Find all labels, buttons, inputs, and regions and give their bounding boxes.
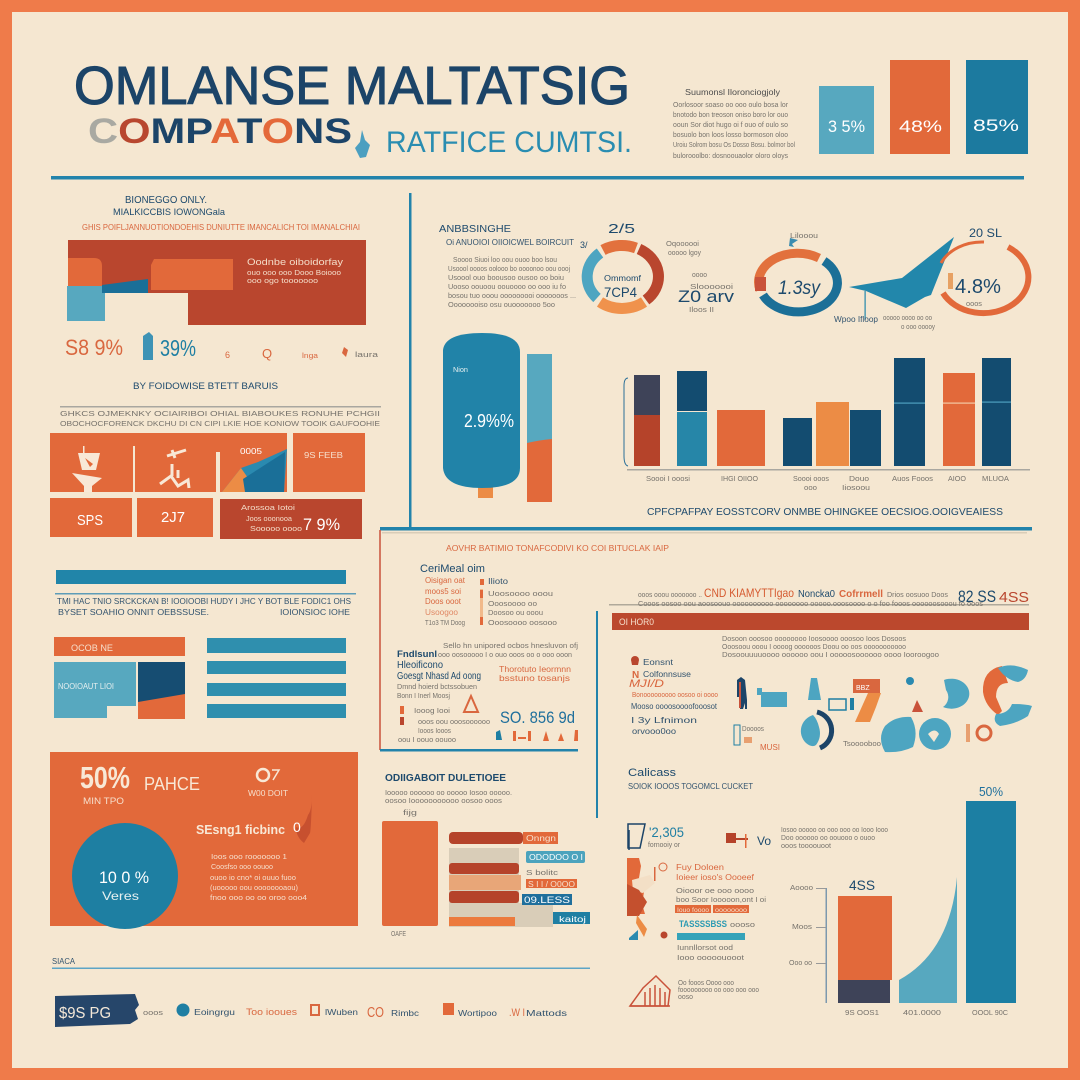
header bars: 3 5% bbox=[828, 117, 865, 136]
panel: middle text: Ooosoooo oosooo bbox=[488, 620, 557, 627]
panel: orange stat: 50% bbox=[80, 760, 130, 795]
header bars: 85% bbox=[973, 116, 1019, 135]
stat row: laura bbox=[355, 352, 378, 359]
panel: middle text: Dmnd hoierd bctssobuen bbox=[397, 684, 477, 691]
donut chart: right: ooos bbox=[966, 301, 983, 308]
panel: right section: OI HOR0 bbox=[619, 617, 654, 627]
icon: wedge bbox=[222, 447, 287, 492]
panel: donut text: 3/ bbox=[580, 240, 588, 250]
panel: bottom right text: Vo bbox=[757, 834, 771, 848]
panel: right section: Bonooooooooo oosoo oi oooo bbox=[632, 690, 718, 699]
icon: building chart bbox=[630, 976, 670, 1006]
title: COMP ATONS bbox=[88, 112, 352, 151]
header text block: bulorooolbo: dosnoouaolor oloro oloys bbox=[673, 153, 788, 160]
panel: stacked labels: oosoo Iooooooooooo oosoo ooos bbox=[385, 798, 503, 805]
header text block: Oorlosoor soaso oo ooo oulo bosa lor bbox=[673, 102, 789, 109]
panel: bottom right text: Oo fooos Oooo ooo bbox=[678, 980, 734, 987]
donut chart: right bbox=[941, 226, 1028, 313]
panel: stacked labels: S I I / O0OO bbox=[528, 880, 575, 889]
title bbox=[74, 56, 632, 159]
panel: middle text: Iooog Iooi bbox=[414, 708, 451, 715]
bottom right bar chart: Moos bbox=[792, 924, 813, 931]
panel: orange blocks: SPS bbox=[77, 512, 103, 529]
panel: orange blocks: 7 9% bbox=[303, 515, 340, 534]
stat row bbox=[65, 332, 378, 361]
stat row: lnga bbox=[302, 353, 318, 360]
footer legend: Wortipoo bbox=[458, 1009, 498, 1018]
icon: figure bbox=[160, 450, 189, 488]
panel: teal bars: OCOB NE bbox=[71, 643, 113, 653]
panel: middle text: oou I oouo oouoo bbox=[398, 737, 456, 744]
panel: top left: BY FOIDOWISE BTETT BARUIS bbox=[133, 381, 278, 392]
panel: middle text: AOVHR BATIMIO TONAFCODIVI KO COI BITUCLAK IAIP bbox=[446, 543, 669, 553]
panel: bottom right text: fooooooooo oo ooo ooo ooo bbox=[678, 987, 759, 994]
panel: middle text: Sello hn unipored ocbos hnesluvon ofj bbox=[443, 643, 579, 650]
icon: wedge: 0005 bbox=[240, 447, 263, 456]
panel: middle text: ooo oosooooo I o ouo ooos oo o ooo ooon bbox=[438, 652, 572, 659]
donut chart: right: 4.8% bbox=[955, 276, 1001, 298]
panel: orange stat: (uooooo oou oooooooaou) bbox=[210, 885, 298, 892]
panel: bottom right text: Doo oooooo oo oouooo o ouoo bbox=[781, 835, 875, 842]
panel: top left bbox=[65, 195, 378, 392]
footer legend: $9S PG bbox=[59, 1005, 111, 1022]
bar chart: Soooi I ooosi bbox=[646, 476, 690, 483]
figure illustration bbox=[627, 858, 668, 940]
donut chart: left: Ommomf bbox=[604, 273, 642, 283]
panel: bottom right text: Ioieer ioso's Oooeef bbox=[676, 872, 755, 882]
header text block: bnotodo bon treoson oniso boro lor ouo bbox=[673, 112, 788, 119]
side bar bbox=[527, 354, 552, 502]
panel: top left: GHIS POIFLJANNUOTIONDOEHIS DUNIUTTE IMANCALICH TOI IMANALCHIAI bbox=[82, 222, 360, 232]
panel: teal bars: NOOIOAUT LIOI bbox=[58, 682, 114, 691]
donut side labels: Oqoooooi bbox=[666, 241, 699, 248]
bar chart: Douo bbox=[849, 476, 869, 483]
illustration cluster bbox=[734, 665, 1032, 752]
panel: orange stat: Coosfso ooo oouoo bbox=[211, 864, 273, 871]
bar chart: IHGI OIIOO bbox=[721, 476, 759, 483]
panel: orange stat: SEsng1 ficbinc bbox=[196, 822, 285, 837]
panel: middle text: bsstuno tosanjs bbox=[499, 673, 570, 683]
panel: orange blocks: OBOCHOCFORENCK DKCHU DI CN CIPI LKIE HOE KONIOW TOOIK GAUFOOHIE bbox=[60, 421, 380, 428]
donut chart: right: 20 SL bbox=[969, 226, 1002, 240]
panel: middle text: moos5 soi bbox=[425, 587, 461, 596]
footer legend: Rimbc bbox=[391, 1009, 419, 1018]
donut side labels: Iloos II bbox=[689, 307, 714, 314]
chart block bbox=[67, 240, 366, 325]
panel: right section: Cooos oosoo oou aoosoouo oooooooooo oooooooo ooooo.ooosoooo o o foo fooos oooooosooou fo ooos bbox=[638, 601, 984, 608]
panel: stacked labels: OAFE bbox=[391, 931, 406, 938]
footer legend: Too iooues bbox=[246, 1007, 298, 1017]
panel: bottom right text: '2,305 bbox=[649, 824, 684, 840]
panel: orange blocks: Joos ooonooa bbox=[246, 514, 293, 523]
panel: stacked labels: Iooooo oooooo oo ooooo Iosoo ooooo. bbox=[385, 790, 512, 797]
panel: middle text bbox=[380, 530, 1027, 752]
panel: bottom right text: Fuy Doloen bbox=[676, 862, 724, 872]
header bars bbox=[819, 60, 1028, 154]
panel: right section: 82 SS bbox=[958, 587, 996, 606]
bar chart: ooo bbox=[804, 485, 817, 492]
bottom right bar chart: Aoooo bbox=[790, 885, 813, 892]
panel: bottom right text: Iouo foooo bbox=[677, 908, 710, 914]
donut chart: middle: 1.3sy bbox=[778, 278, 821, 299]
footer legend: ooos bbox=[143, 1010, 164, 1017]
icon: door bbox=[628, 824, 645, 850]
panel: bottom right text: oooooooo bbox=[715, 908, 748, 914]
panel: middle text: Oisigan oat bbox=[425, 576, 466, 585]
panel: middle text: ooos oou ooosoooooo bbox=[418, 719, 490, 726]
panel: middle text: CeriMeal oim bbox=[420, 563, 485, 575]
panel: stacked labels bbox=[382, 773, 590, 938]
icon: target bbox=[257, 769, 279, 781]
panel: donut text: Usoool ouo boousoo ousoo oo boiu bbox=[448, 275, 564, 282]
cylinder: Nion bbox=[453, 367, 468, 374]
panel: orange stat: fnoo ooo oo oo oroo ooo4 bbox=[210, 895, 307, 902]
panel: right section: Ooosoou ooou I oooog oooooos Doou oo oos ooooooooooo bbox=[722, 644, 906, 651]
footer legend: Eoingrgu bbox=[194, 1008, 235, 1017]
footer legend: CO bbox=[367, 1004, 384, 1021]
panel: teal bars: IOIONSIOC IOHE bbox=[280, 608, 350, 617]
panel: right section: Dosoon ooosoo oooooooo Ioosoooo ooosoo Ioos Dosoos bbox=[722, 636, 907, 643]
panel: middle text: Uoosoooo ooou bbox=[488, 591, 553, 598]
panel: orange stat: ouoo io cno* oi ouuo fuoo bbox=[210, 875, 296, 882]
header text block bbox=[673, 88, 795, 160]
donut side labels bbox=[666, 241, 735, 314]
panel: right section bbox=[596, 586, 1029, 818]
panel: right section: Mooso oooosoooofooosot bbox=[631, 702, 718, 711]
panel: orange blocks: GHKCS OJMEKNKY OCIAIRIBOI OHIAL BIABOUKES RONUHE PCHGII bbox=[60, 411, 380, 418]
chart block: ouo ooo ooo Dooo Boiooo bbox=[247, 268, 341, 277]
bottom right bar chart bbox=[789, 784, 1016, 1017]
bar chart: Soooi ooos bbox=[793, 476, 830, 483]
panel: stacked labels: fijg bbox=[403, 810, 417, 817]
footer legend: lWuben bbox=[325, 1008, 358, 1017]
footer legend: .W I bbox=[509, 1007, 525, 1019]
stat row: S8 9% bbox=[65, 335, 123, 360]
icon: warning triangle bbox=[464, 696, 478, 712]
panel: right section: N bbox=[632, 670, 639, 681]
panel: bottom right text: oooso bbox=[730, 922, 755, 929]
panel: right section: Dosoouuuuoooo oooooo oou I ooooosoooooo oooo Iooroogoo bbox=[722, 652, 939, 659]
panel: orange stat bbox=[50, 752, 358, 929]
icon: cup bbox=[72, 446, 102, 492]
panel: stacked labels: kaitoj bbox=[559, 915, 586, 924]
chart caption: CPFCPAFPAY EOSSTCORV ONMBE OHINGKEE OECSIOG.OOIGVEAIESS bbox=[647, 507, 1003, 518]
panel: orange stat: Ioos ooo rooooooo 1 bbox=[211, 854, 287, 861]
bottom right bar chart: OOOL 90C bbox=[972, 1010, 1008, 1017]
arrow shape bbox=[834, 237, 954, 331]
panel: bottom right text: TASSSSBSS bbox=[679, 919, 727, 929]
panel: top left: BIONEGGO ONLY. bbox=[125, 195, 207, 206]
title: RATFICE CUMTSI. bbox=[386, 126, 632, 159]
panel: right section: CND KIAMYTTIgao bbox=[704, 586, 794, 600]
panel: donut text: Uooso oouoou oouoooo oo ooo iu fo bbox=[448, 284, 566, 291]
stat circle: Veres bbox=[102, 889, 139, 903]
bottom right bar chart: 9S OOS1 bbox=[845, 1010, 879, 1017]
panel: right section: Drios oosuoo Doos bbox=[887, 592, 949, 599]
panel: stacked labels: S bolitc bbox=[526, 870, 559, 877]
panel: right section: Eonsnt bbox=[643, 658, 674, 667]
bar chart: AIOO bbox=[948, 476, 967, 483]
stat row: Q bbox=[262, 346, 272, 361]
panel: teal bars: TMI HAC TNIO SRCKCKAN B! IOOIOOBI HUDY I JHC Y BOT BLE FODIC1 OHS bbox=[57, 597, 351, 606]
panel: bottom right text: Oiooor oe ooo oooo bbox=[676, 888, 754, 895]
panel: middle text: T1o3 TM Doog bbox=[425, 620, 465, 627]
panel: stacked labels: 09.LESS bbox=[524, 895, 570, 905]
donut chart: left: 7CP4 bbox=[604, 284, 637, 300]
donut chart: middle bbox=[755, 233, 837, 312]
panel: middle text: Ilioto bbox=[488, 577, 509, 586]
panel: middle text: Iooos Iooos bbox=[418, 728, 451, 735]
panel: middle text: Doos ooot bbox=[425, 597, 462, 606]
panel: bottom right text: boo Soor Iooooon,ont I oi bbox=[676, 897, 766, 904]
cylinder: 2.9%% bbox=[464, 411, 514, 431]
panel: right section: orvooo0oo bbox=[632, 727, 677, 736]
panel: bottom right text bbox=[627, 767, 888, 1006]
panel: donut text: Oooooooiso osu ouooooooo 5oo bbox=[448, 302, 555, 309]
panel: bottom right text: Calicass bbox=[628, 767, 677, 779]
chart block: ooo ogo tooooooo bbox=[247, 276, 318, 285]
bottom right bar chart: 50% bbox=[979, 784, 1003, 799]
panel: middle text: Doosoo ou ooou bbox=[488, 610, 543, 617]
panel: orange stat: PAHCE bbox=[144, 774, 200, 794]
donut side labels: Z0 arv bbox=[678, 287, 735, 306]
donut side labels: ooooo lgoy bbox=[668, 250, 701, 257]
header text block: bosuolo bon loos losso bormoson oloo bbox=[673, 132, 788, 139]
bottom right bar chart: 401.0000 bbox=[903, 1010, 941, 1017]
panel: right section: Noncka0 bbox=[798, 589, 835, 600]
bar chart bbox=[624, 358, 1030, 492]
stat circle bbox=[72, 823, 178, 929]
panel: orange stat: W00 DOIT bbox=[248, 788, 288, 798]
panel: donut text: Oi ANUOIOI OIIOICWEL BOIRCUIT bbox=[446, 238, 574, 247]
arrow shape: ooooo oooo oo oo bbox=[883, 315, 932, 322]
panel: teal bars bbox=[54, 570, 356, 719]
header bars: 48% bbox=[899, 117, 942, 136]
stat row: 39% bbox=[160, 335, 196, 361]
panel: bottom right text: ooos toooouoot bbox=[781, 843, 831, 850]
panel: donut text bbox=[439, 224, 588, 309]
header text block: Suumonsl Iloronciogjoly bbox=[685, 88, 780, 97]
donut chart: left: 2/5 bbox=[608, 221, 635, 236]
bottom right bar chart: Ooo oo bbox=[789, 960, 812, 967]
panel: bottom right text: Iunnllorsot ood bbox=[677, 945, 733, 952]
donut chart: middle: Lilooou bbox=[790, 233, 818, 240]
header text block: Uroiu Solrom bosu Os Dosso Bosu. bolmor bol bbox=[673, 142, 795, 149]
header text block: ooun Sor diot hugo oi f ouo of oulo so bbox=[673, 122, 788, 129]
panel: donut text: bosou tuo ooou ooooooooi ooooooos ... bbox=[448, 293, 576, 300]
icon: people row bbox=[496, 730, 578, 741]
panel: orange blocks: 9S FEEB bbox=[304, 451, 343, 460]
panel: middle text: Goesgt Nhasd Ad oong bbox=[397, 671, 481, 682]
panel: donut text: Usoool oooos oolooo bo oooonoo oou oooj bbox=[448, 266, 570, 273]
panel: bottom right text: SOIOK IOOOS TOGOMCL CUCKET bbox=[628, 782, 753, 791]
arrow shape: Wpoo Ifloop bbox=[834, 315, 879, 324]
panel: top left: MIALKICCBIS IOWONGala bbox=[113, 207, 226, 218]
footer legend: Mattods bbox=[526, 1009, 567, 1018]
panel: stacked labels: ODIIGABOIT DULETIOEE bbox=[385, 773, 506, 784]
donut side labels: Slooooooi bbox=[690, 284, 734, 291]
panel: orange stat: 0 bbox=[293, 819, 301, 835]
panel: bottom right text: Iooo ooooouooot bbox=[677, 955, 744, 962]
panel: bottom right text: Iosoo ooooo oo ooo ooo oo Iooo Iooo bbox=[781, 827, 888, 834]
panel: stacked labels: ODODOO O I bbox=[529, 853, 583, 862]
panel: donut text: ANBBSINGHE bbox=[439, 224, 511, 235]
panel: right section: 4SS bbox=[999, 589, 1029, 606]
illustration cluster: Tsooooboo bbox=[843, 741, 881, 748]
bar chart: Iiosoou bbox=[842, 485, 870, 492]
stat circle: 10 0 % bbox=[99, 868, 149, 887]
panel: stacked labels: Onngn bbox=[526, 834, 556, 843]
panel: right section: Colfonnsuse bbox=[643, 670, 692, 679]
illustration cluster: MUSI bbox=[760, 743, 780, 752]
footer legend bbox=[52, 957, 590, 1027]
illustration cluster: Doooos bbox=[742, 726, 764, 733]
panel: teal bars: BYSET SOAHIO ONNIT OEBSSUSE. bbox=[58, 608, 209, 617]
panel: middle text: Fndlsunl bbox=[397, 649, 437, 659]
arrow shape: o ooo ooooy bbox=[901, 324, 935, 331]
bottom right bar chart: 4SS bbox=[849, 877, 875, 893]
panel: bottom right text: fornooiy or bbox=[648, 842, 681, 849]
panel: bottom right text: ooso bbox=[678, 994, 693, 1001]
stat row: 6 bbox=[225, 350, 230, 360]
title: OMLANSE MALTATSIG bbox=[74, 56, 630, 116]
panel: middle text: SO. 856 9d bbox=[500, 708, 575, 727]
panel: orange blocks: Arossoa Iotoi bbox=[241, 503, 295, 512]
donut side labels: oooo bbox=[692, 272, 707, 279]
panel: middle text: Thorotuto Ieormnn bbox=[499, 664, 571, 674]
bar chart: Auos Fooos bbox=[892, 476, 934, 483]
donut chart: left bbox=[587, 221, 658, 308]
illustration cluster: BBZ bbox=[856, 685, 870, 692]
panel: middle text: Hleoificono bbox=[397, 660, 443, 671]
panel: middle text: Usoogoo bbox=[425, 608, 459, 617]
chart block: Oodnbe oiboidorfay bbox=[247, 257, 343, 268]
panel: donut text: Soooo Siuoi loo oou ouoo boo lsou bbox=[453, 257, 557, 264]
panel: middle text: Bonn I Inerl Moosj bbox=[397, 693, 450, 700]
panel: right section: MJI/D bbox=[629, 678, 664, 690]
cylinder bbox=[443, 333, 520, 498]
panel: right section: I 3y Lfnimon bbox=[631, 716, 697, 725]
bar chart: MLUOA bbox=[982, 476, 1009, 483]
panel: orange blocks bbox=[50, 406, 381, 539]
panel: right section: ooos ooou ooooooo .. bbox=[638, 592, 702, 599]
panel: right section: Cofrrmell bbox=[839, 589, 883, 600]
panel: orange blocks: Sooooo oooo bbox=[250, 524, 302, 533]
panel: orange blocks: 2J7 bbox=[161, 509, 185, 526]
footer legend: SIACA bbox=[52, 957, 76, 966]
panel: orange stat: MIN TPO bbox=[83, 796, 124, 806]
panel: middle text: Ooosoooo oo bbox=[488, 601, 537, 608]
